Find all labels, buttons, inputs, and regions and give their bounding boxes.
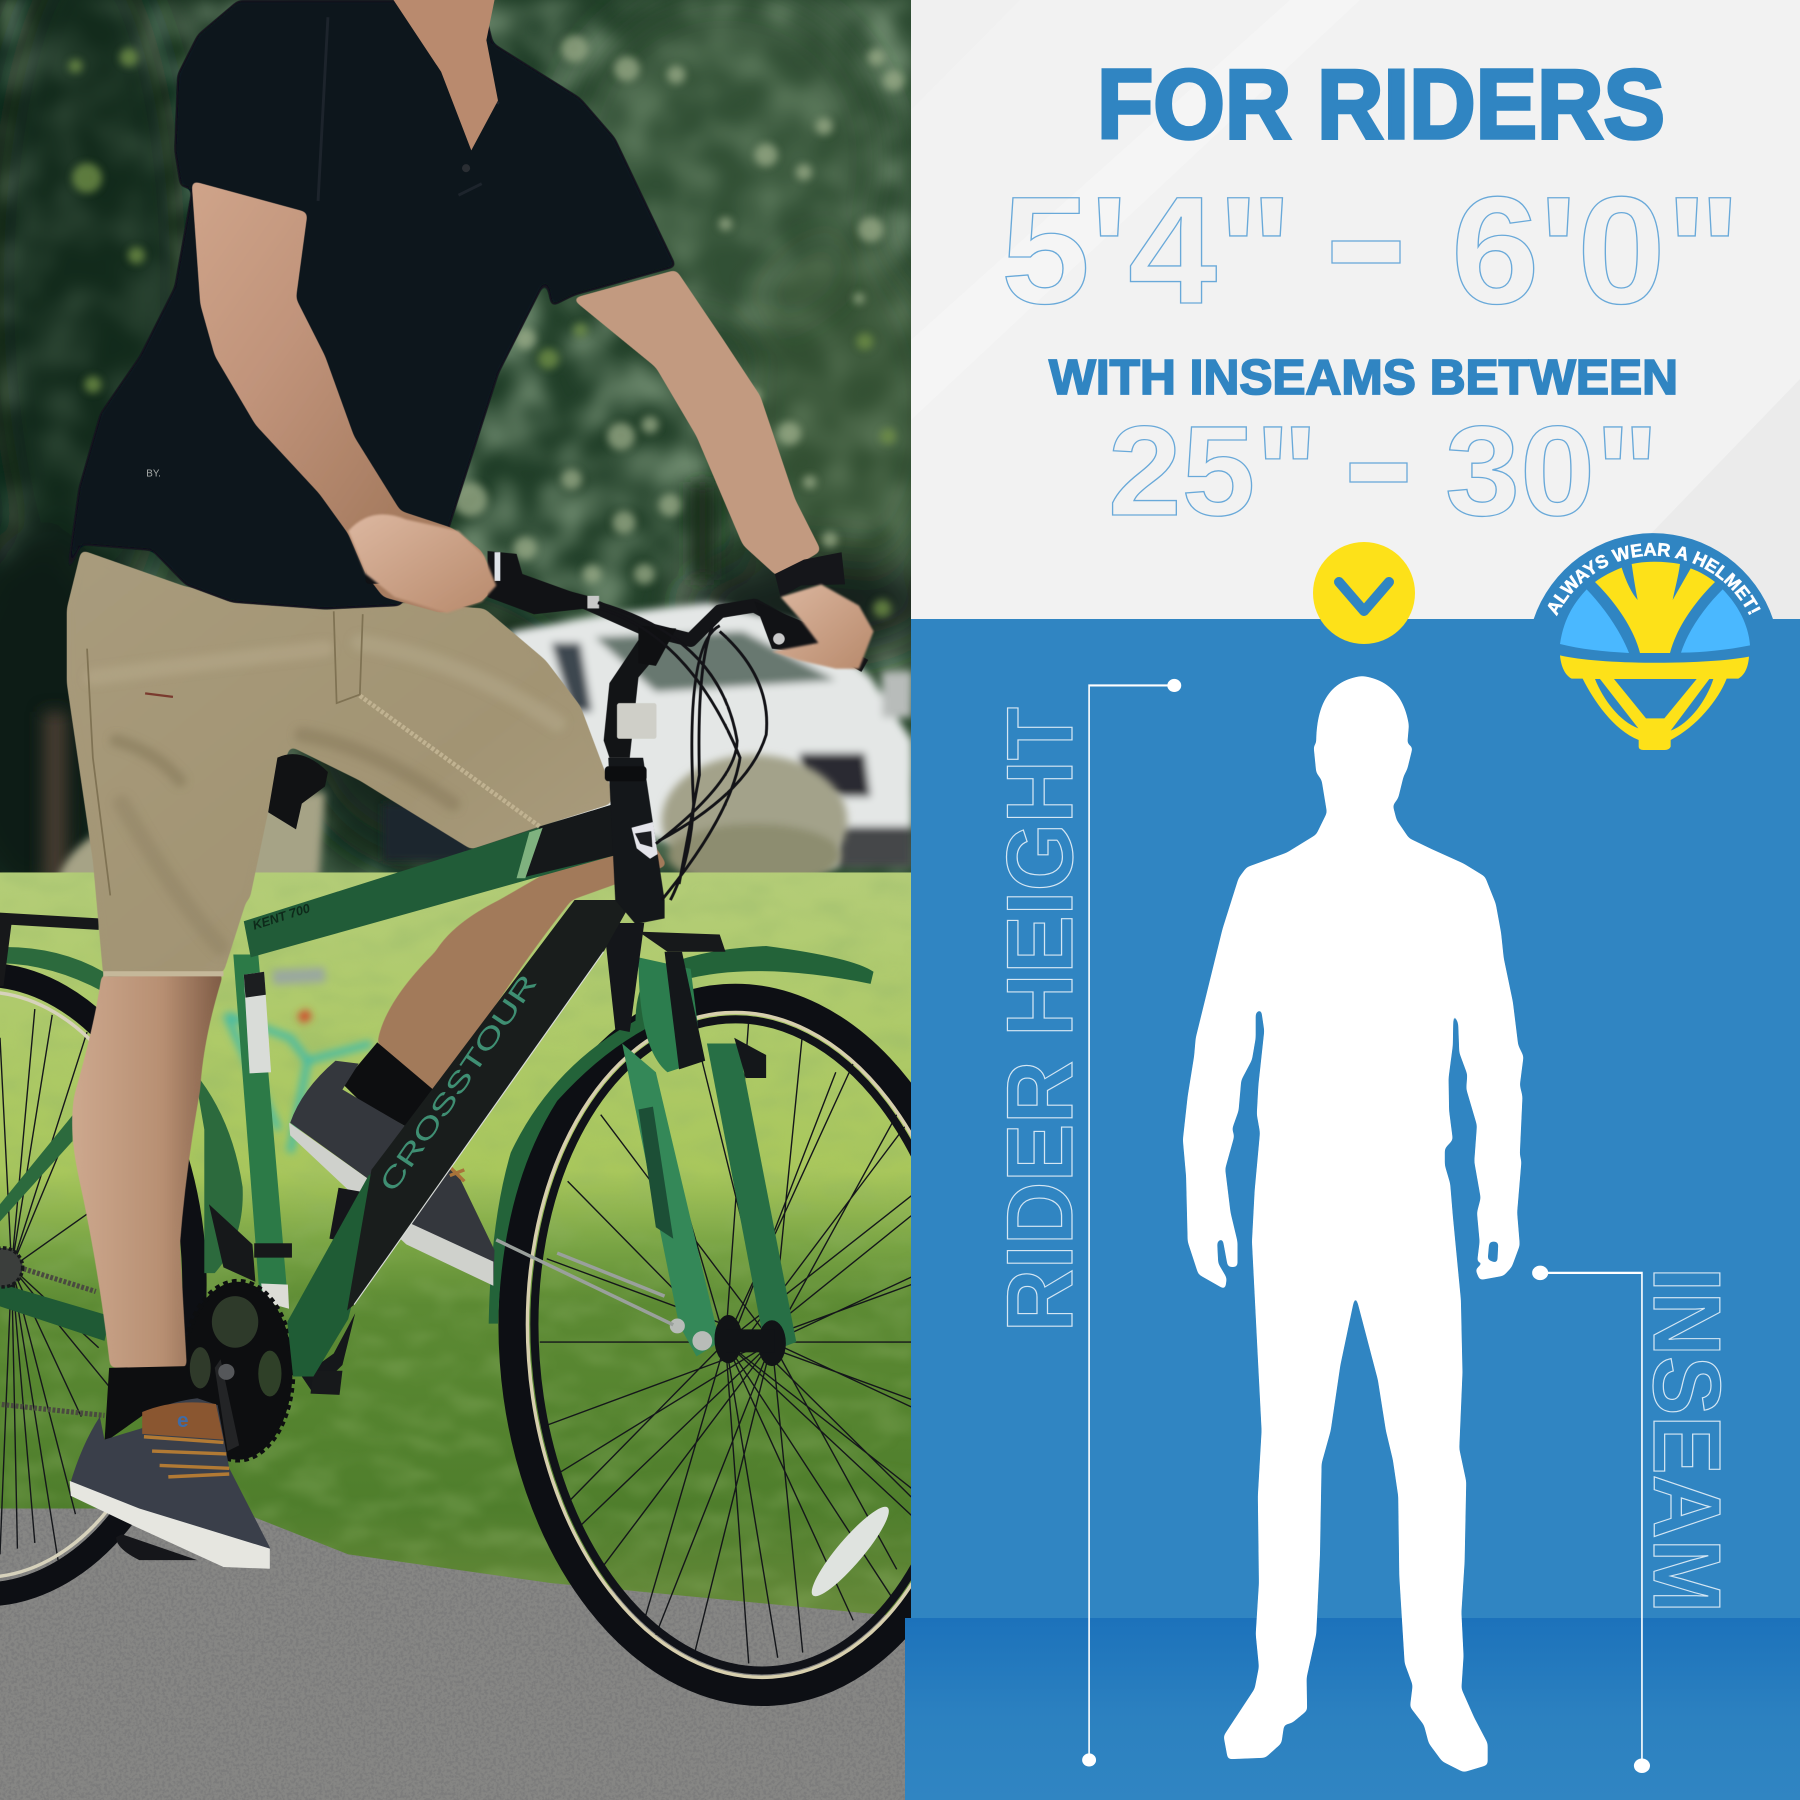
rear fender [0, 947, 243, 1273]
near hand [348, 514, 496, 613]
down tube [287, 900, 633, 1376]
photo: cyclist on green bike [0, 0, 1008, 1800]
car in background [383, 603, 912, 867]
grass lawn [0, 872, 912, 1619]
rider height range: 5'4" [1001, 165, 1293, 336]
near arm [192, 181, 496, 613]
rider height range [1001, 165, 1741, 336]
front shoe and sock [70, 1366, 270, 1569]
crosstour wordmark: CROSSTOUR [374, 969, 543, 1197]
inseam range [1108, 400, 1659, 543]
inseam measure line [1532, 1266, 1650, 1773]
rider height label: RIDER HEIGHT [987, 707, 1092, 1332]
brake cables [598, 603, 767, 900]
tree background [0, 0, 946, 918]
handlebar and brake levers [366, 551, 865, 900]
paved road [0, 1497, 912, 1800]
neck [394, 0, 498, 150]
panel: light header background [911, 0, 1800, 620]
head tube lower [604, 923, 644, 1032]
rider height range: 6'0" [1451, 165, 1741, 336]
helmet icon [1560, 562, 1750, 750]
fork [496, 923, 796, 1366]
stem and head tube [604, 640, 667, 924]
inseam range: 25" [1108, 400, 1318, 543]
front fender [489, 946, 874, 1324]
rider silhouette [1183, 676, 1524, 1772]
rear rack [0, 913, 99, 986]
rear wheel [0, 913, 243, 1595]
spoke reflector [812, 1506, 889, 1596]
front hub [714, 1315, 786, 1366]
watch [775, 552, 845, 597]
panel: blue sizing background [911, 619, 1800, 1800]
seat tube [233, 955, 292, 1309]
rear leg and foot [289, 820, 667, 1286]
spokes [540, 1024, 911, 1664]
crankset [183, 1204, 355, 1460]
badge: always wear a helmet [1534, 533, 1773, 750]
far hand [772, 584, 874, 669]
rear chain and stays [0, 1261, 104, 1415]
inseam label: INSEAM [1633, 1267, 1740, 1613]
background teal bicycle [226, 975, 371, 1153]
front shoe and sock: e [177, 1409, 189, 1432]
floor band [905, 1618, 1800, 1800]
brake cable [496, 1240, 673, 1325]
far arm [572, 270, 821, 577]
leg [72, 974, 223, 1368]
front shorts and leg [67, 550, 612, 1368]
boulders [54, 750, 852, 872]
rear derailleur cogs [0, 1248, 23, 1287]
shorts [67, 550, 612, 977]
icon: yellow down chevron button [1313, 542, 1415, 644]
head badge [631, 822, 658, 859]
front reflector [617, 703, 656, 739]
subheading: with inseams between: WITH INSEAMS BETWEEN [1049, 351, 1678, 405]
badge: always wear a helmet: ALWAYS WEAR A HELMET! [1548, 542, 1761, 616]
front wheel [498, 984, 911, 1706]
top tube [244, 804, 615, 957]
saddle [268, 754, 328, 829]
heading: for riders: FOR RIDERS [1097, 49, 1665, 159]
rider height measure line [1082, 679, 1181, 1766]
seat tube sticker [244, 972, 271, 1073]
top tube: KENT 700 [251, 901, 312, 933]
tire [498, 984, 911, 1706]
shirt tag and buttons [146, 17, 499, 479]
shirt tag and buttons: BY. [146, 468, 161, 479]
shirt [66, 0, 677, 610]
inseam range: 30" [1445, 400, 1659, 543]
